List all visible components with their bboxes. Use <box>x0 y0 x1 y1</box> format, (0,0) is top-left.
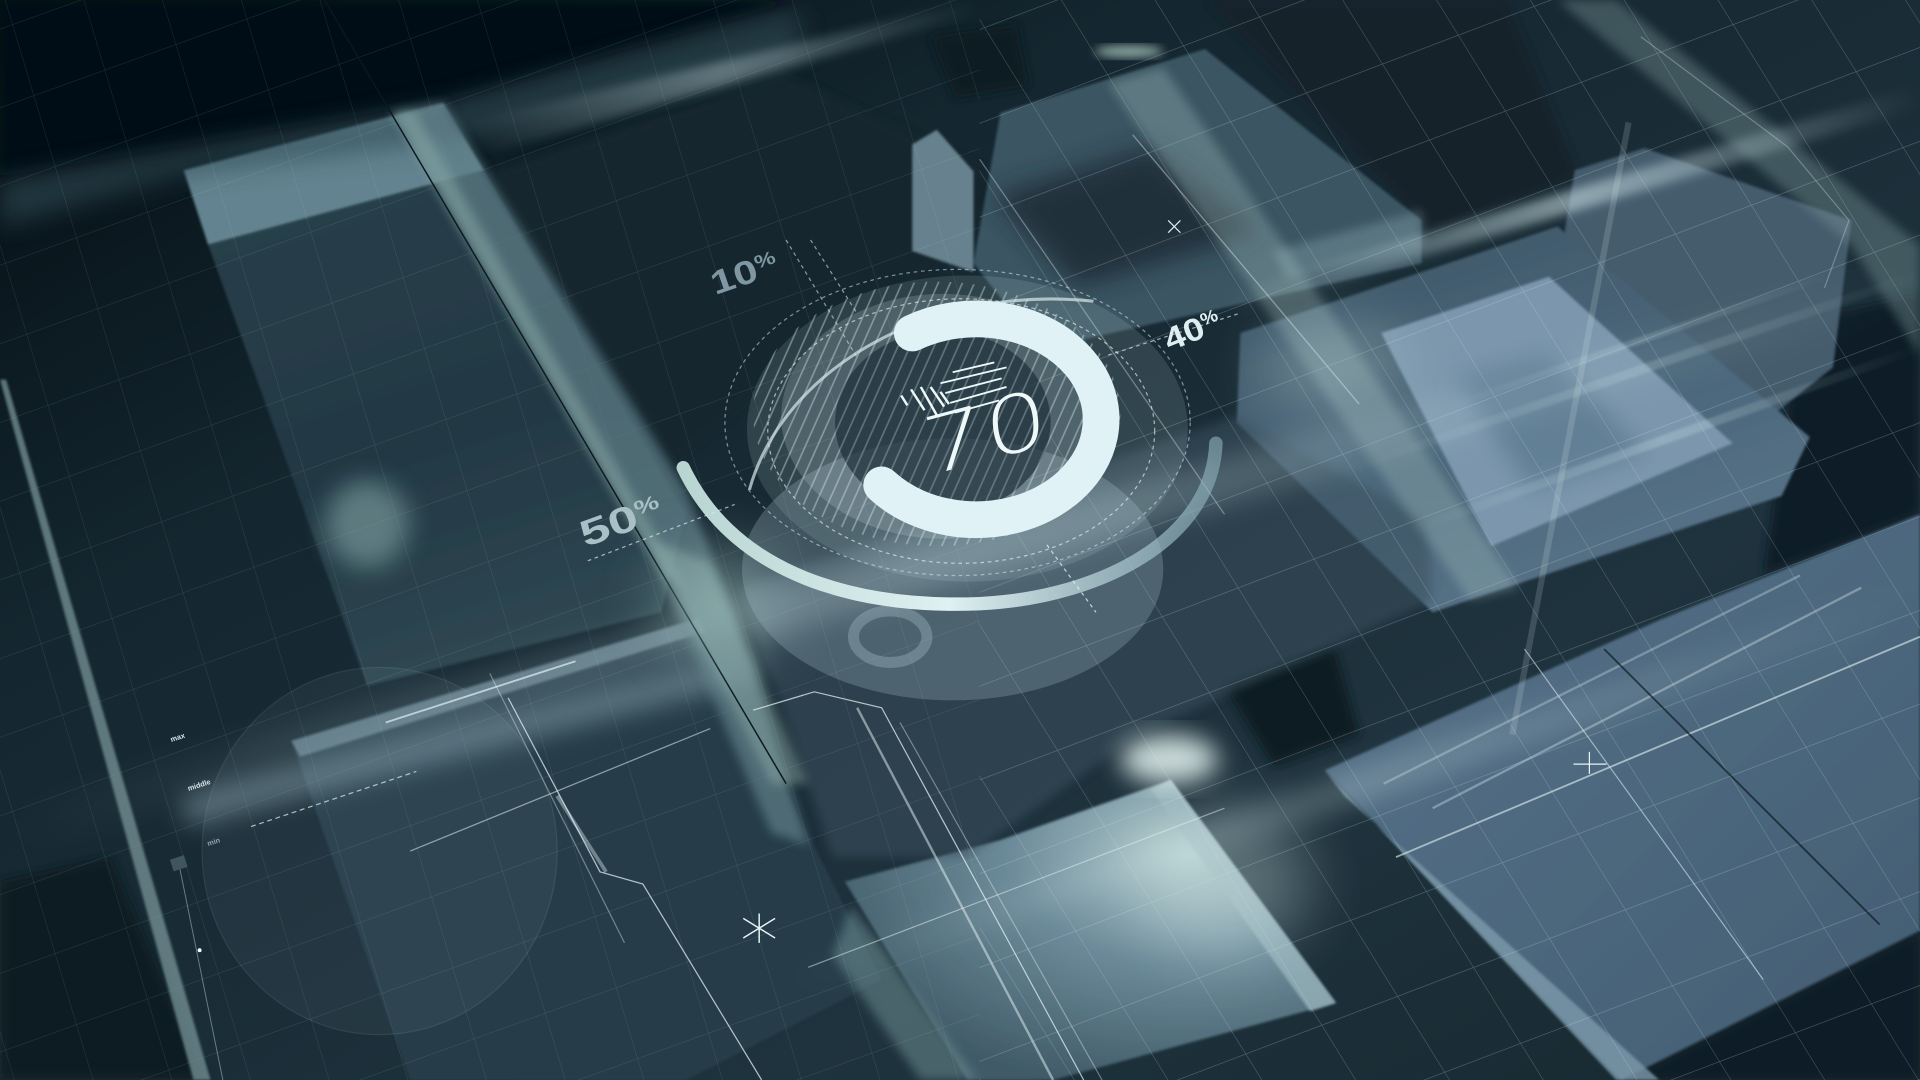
axis labels: min <box>206 835 222 848</box>
outer sweep arc <box>683 443 1216 604</box>
label: 10%: 10 <box>706 252 763 302</box>
panel: upright slab <box>912 130 973 272</box>
leader: 50% <box>588 504 735 561</box>
panel: lower left rim <box>291 618 705 757</box>
panel: lower teal strip <box>833 906 978 1080</box>
label: 40%: % <box>1197 305 1221 329</box>
hatch ring <box>753 282 1120 546</box>
glows <box>326 45 1408 955</box>
value: 70: 70 <box>917 372 1053 495</box>
axis labels: max <box>169 731 187 744</box>
main ring <box>882 319 1101 520</box>
panel: tall column right <box>1558 148 1851 422</box>
outer disc <box>747 276 1188 582</box>
main teal strip <box>392 67 1518 845</box>
icon: wave bars <box>901 387 949 415</box>
panel: top right lit strip <box>1558 0 1920 355</box>
icon: star mark top <box>1168 220 1180 233</box>
label: 40% <box>1108 304 1239 358</box>
panel: top centre block <box>973 49 1422 349</box>
axis labels <box>169 731 222 848</box>
hairline <box>324 0 786 784</box>
panel: right cube outer <box>1237 227 1810 612</box>
label: 50%: 50 <box>574 496 644 555</box>
label: 50% <box>574 487 735 561</box>
label: 50%: % <box>631 491 663 520</box>
panel: top centre dark core <box>992 147 1261 288</box>
panel: left block top cap <box>184 103 484 245</box>
label: 10% <box>706 240 857 358</box>
small ring <box>853 611 927 662</box>
grid right <box>980 0 1920 1080</box>
panel: right cube inner <box>1457 355 1647 490</box>
label: 40%: 40 <box>1159 310 1210 358</box>
panel: lower centre rim <box>1151 780 1336 1011</box>
icon: star mark right <box>1573 752 1607 774</box>
axis handle <box>170 855 223 1080</box>
leader: 10% <box>786 240 857 358</box>
panel: lower centre block <box>845 780 1336 1080</box>
inner dark core <box>835 331 1051 514</box>
thin arc <box>749 299 1093 490</box>
panel: centre mid block <box>741 416 1433 857</box>
left edge strip <box>0 380 211 1080</box>
leader: lower dashed <box>1047 545 1096 612</box>
panel: upper mid band <box>0 10 800 227</box>
inner hatch <box>835 331 1051 514</box>
panel: top centre rim <box>1273 211 1422 279</box>
panel: bottom right block <box>1325 514 1920 1080</box>
dashed outer ring <box>725 269 1190 576</box>
panel: left block body <box>208 170 686 686</box>
panel: bottom right rim <box>1325 770 1659 1080</box>
middle band <box>781 294 1104 539</box>
gauge <box>683 269 1216 700</box>
axis labels: middle <box>186 777 212 793</box>
large faint circle <box>202 667 557 1035</box>
dome cylinder <box>742 438 1163 700</box>
icon: lines <box>940 362 1007 413</box>
grid left <box>0 0 980 1080</box>
dashed inner ring <box>768 299 1155 563</box>
leader: 40% <box>1108 313 1239 355</box>
icon: star mark lower left <box>743 913 775 943</box>
label: 10%: % <box>751 247 778 273</box>
panel: lower left block <box>291 618 882 1080</box>
panel: right cube top <box>1381 277 1733 546</box>
